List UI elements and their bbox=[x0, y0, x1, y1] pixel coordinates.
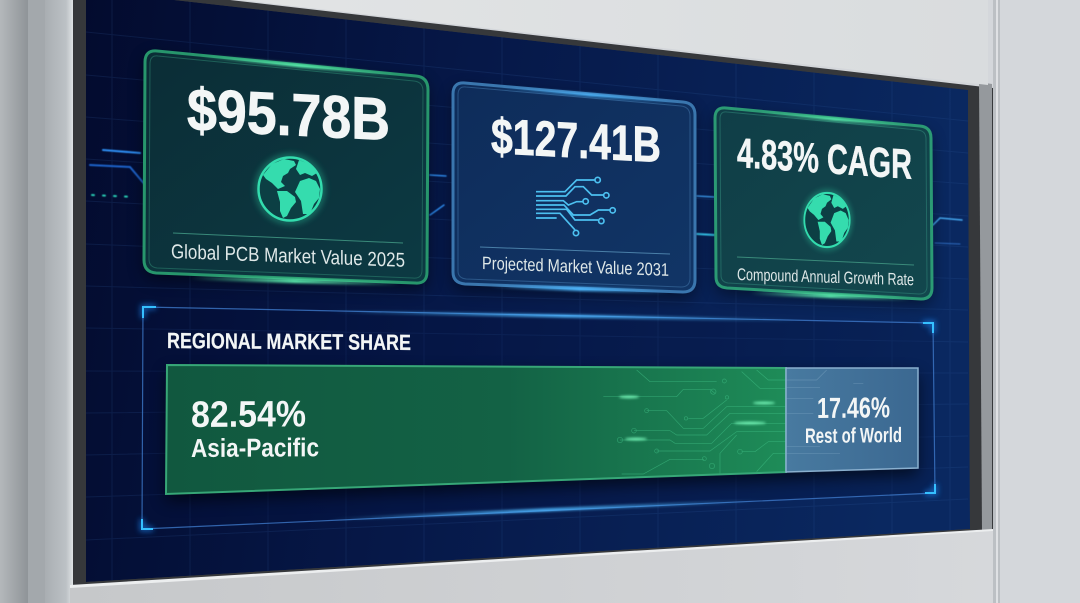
label: Global PCB Market Value 2025 bbox=[171, 241, 405, 272]
label: Projected Market Value 2031 bbox=[482, 253, 669, 280]
value: 82.54% bbox=[191, 393, 306, 435]
card: CAGR bbox=[715, 108, 932, 305]
panel: regional market share bbox=[142, 307, 935, 529]
region name: Rest of World bbox=[805, 424, 902, 448]
value: $127.41B bbox=[491, 108, 661, 173]
value: 4.83% CAGR bbox=[737, 129, 912, 188]
value: $95.78B bbox=[187, 76, 390, 153]
label: Compound Annual Growth Rate bbox=[737, 265, 914, 289]
icon: circuit bbox=[536, 177, 615, 236]
region name: Asia-Pacific bbox=[191, 432, 319, 463]
value: 17.46% bbox=[817, 392, 890, 425]
icon: globe bbox=[254, 153, 326, 225]
heading: REGIONAL MARKET SHARE bbox=[167, 328, 411, 355]
circuit glow traces bbox=[90, 150, 962, 244]
left wall bbox=[0, 0, 73, 603]
card: global market value bbox=[144, 51, 428, 289]
bottom wall panel bbox=[70, 530, 993, 603]
segment: Rest of World bbox=[786, 368, 918, 472]
right wall bbox=[988, 0, 1080, 603]
right frame strip bbox=[979, 82, 992, 532]
card: projected market value bbox=[453, 83, 695, 298]
top wall panel bbox=[240, 0, 988, 85]
icon: globe bbox=[801, 189, 853, 251]
segment: Asia-Pacific bbox=[166, 365, 787, 494]
stacked bar bbox=[166, 365, 918, 501]
